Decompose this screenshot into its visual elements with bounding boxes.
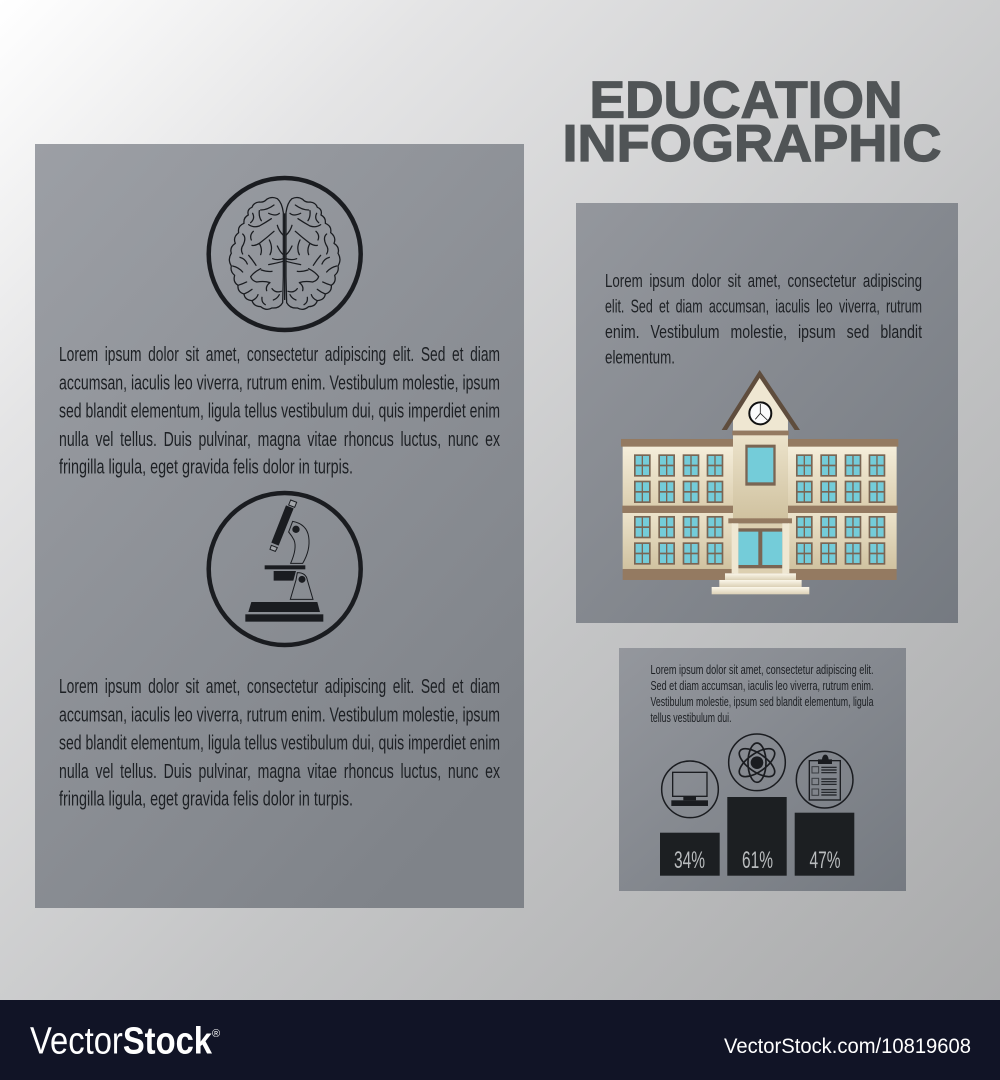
tower [733, 435, 788, 519]
image id: VectorStock.com/10819608 [724, 1035, 971, 1058]
icon: microscope [209, 493, 361, 645]
panel: statistics [619, 648, 906, 891]
bar: 47%: 47% [810, 847, 840, 874]
registered mark: ® [212, 1028, 220, 1040]
wings [623, 446, 733, 506]
text block: statistics description: Lorem ipsum dolor sit amet, consectetur adipiscing elit. [650, 663, 874, 677]
text block: statistics description: Sed et diam accumsan, iaculis leo viverra, rutrum enim. [650, 679, 874, 693]
text block: first paragraph [59, 344, 500, 478]
icon: brain [209, 178, 361, 330]
text block: second paragraph [59, 676, 500, 810]
panel: main left [35, 144, 524, 908]
text block: school description: elementum. [605, 348, 675, 368]
text block: statistics description: tellus vestibulum dui. [650, 711, 732, 725]
text block: second paragraph: accumsan, iaculis leo viverra, rutrum enim. Vestibulum molestie, ipsum [59, 704, 500, 726]
bar: 34% [660, 833, 720, 876]
footer bar [0, 1000, 1000, 1080]
logo: VectorStock [30, 1020, 213, 1062]
text block: statistics description [650, 663, 874, 725]
title: EDUCATION [590, 72, 902, 130]
text block: first paragraph: sed blandit elementum, ligula tellus vestibulum dui, quis imperdiet enim [59, 400, 500, 422]
text block: first paragraph: accumsan, iaculis leo viverra, rutrum enim. Vestibulum molestie, ipsum [59, 372, 500, 394]
steps [725, 573, 796, 580]
text block: second paragraph: nulla vel tellus. Duis pulvinar, magna vitae rhoncus luctus, nunc ex [59, 761, 500, 783]
panel: school [576, 203, 958, 623]
text block: statistics description: Vestibulum molestie, ipsum sed blandit elementum, ligula [650, 695, 874, 709]
icon: school building [621, 370, 898, 594]
text block: second paragraph: fringilla ligula, eget gravida felis dolor in turpis. [59, 788, 353, 810]
text block: second paragraph: sed blandit elementum, ligula tellus vestibulum dui, quis imperdiet enim [59, 732, 500, 754]
windows [634, 454, 651, 477]
text block: first paragraph: fringilla ligula, eget gravida felis dolor in turpis. [59, 456, 353, 478]
text block: first paragraph: Lorem ipsum dolor sit amet, consectetur adipiscing elit. Sed et diam [59, 344, 500, 366]
text block: school description: enim. Vestibulum molestie, ipsum sed blandit [605, 322, 922, 342]
text block: first paragraph: nulla vel tellus. Duis pulvinar, magna vitae rhoncus luctus, nunc ex [59, 429, 500, 451]
text block: school description [605, 271, 922, 368]
bar: 47% [795, 813, 854, 876]
icon: computer [662, 761, 718, 818]
door [734, 523, 787, 573]
title [562, 72, 942, 173]
title: INFOGRAPHIC [562, 115, 942, 173]
icon: atom [729, 734, 785, 791]
bar: 61% [727, 797, 787, 876]
bar: 61%: 61% [742, 847, 773, 874]
bar: 34%: 34% [674, 847, 705, 874]
text block: second paragraph: Lorem ipsum dolor sit amet, consectetur adipiscing elit. Sed et diam [59, 676, 500, 698]
icon: clipboard [796, 751, 853, 808]
